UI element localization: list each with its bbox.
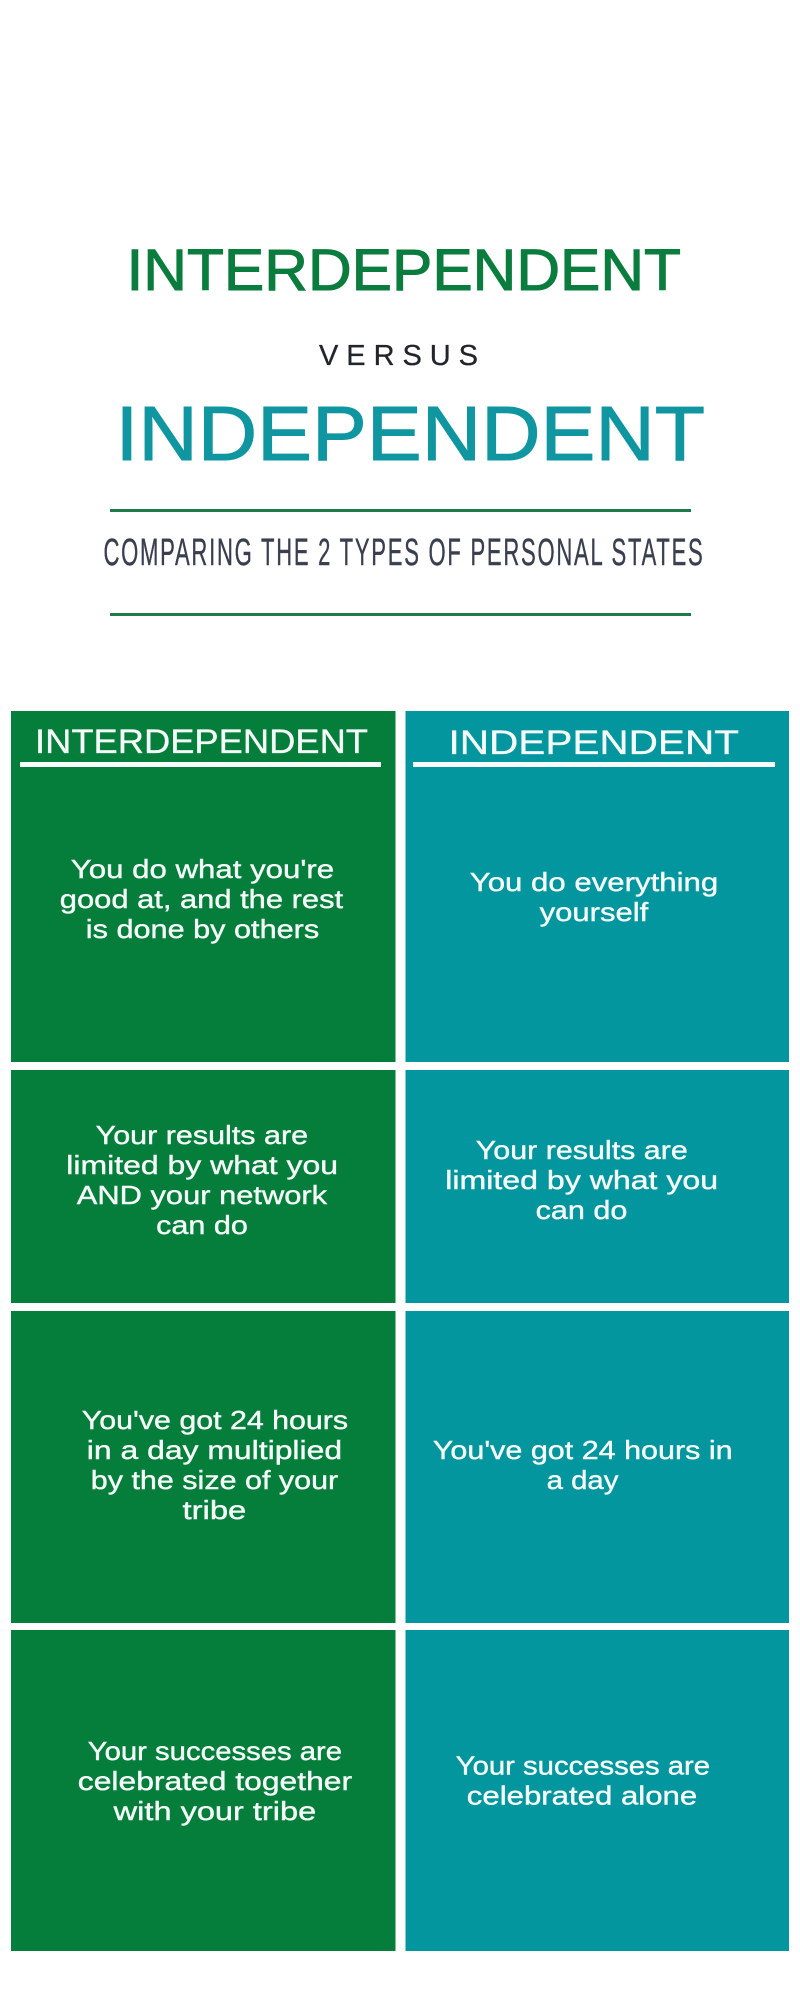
panel: independent row 2: limited by what you bbox=[445, 1165, 718, 1195]
title block bbox=[104, 238, 705, 616]
text: successes celebrated together: Your successes are bbox=[88, 1736, 342, 1766]
column header: independent: INDEPENDENT bbox=[448, 724, 739, 762]
text: results limited by you and network: Your results are bbox=[96, 1120, 308, 1150]
column header: interdependent: INTERDEPENDENT bbox=[35, 723, 368, 761]
panel: independent row 3: a day bbox=[547, 1465, 618, 1495]
panel: independent row 1 bbox=[406, 711, 789, 1062]
panel: interdependent row 4: with your tribe bbox=[112, 1796, 316, 1826]
panel: interdependent row 2: can do bbox=[156, 1210, 248, 1240]
panel: independent row 4 bbox=[406, 1630, 789, 1951]
heading: interdependent: INTERDEPENDENT bbox=[126, 238, 681, 303]
text: you do what you're good at: You do what you're bbox=[71, 854, 334, 884]
panel: interdependent row 2 bbox=[11, 1070, 396, 1303]
panel: interdependent row 3: by the size of your bbox=[91, 1465, 339, 1495]
panel: interdependent row 1: good at, and the rest bbox=[60, 884, 344, 914]
panel: interdependent row 3: in a day multiplied bbox=[87, 1435, 342, 1465]
panel: interdependent row 2: limited by what you bbox=[66, 1150, 338, 1180]
header underline bbox=[413, 762, 775, 767]
heading: independent: INDEPENDENT bbox=[116, 391, 705, 477]
panel: independent row 2 bbox=[406, 1070, 789, 1303]
divider line bottom bbox=[110, 613, 691, 616]
text: 24 hours in a day: You've got 24 hours in bbox=[433, 1435, 733, 1465]
panel: interdependent row 2: AND your network bbox=[77, 1180, 328, 1210]
panel: interdependent row 4: celebrated together bbox=[78, 1766, 353, 1796]
text: successes celebrated alone: Your successes are bbox=[456, 1750, 710, 1780]
panel: interdependent row 3 bbox=[11, 1311, 396, 1623]
panel: independent row 4: celebrated alone bbox=[467, 1780, 697, 1810]
panel: independent row 1: yourself bbox=[540, 897, 649, 927]
text: you do everything yourself: You do everything bbox=[470, 867, 718, 897]
divider line top bbox=[110, 509, 691, 512]
text: results limited by you: Your results are bbox=[476, 1135, 688, 1165]
panel: independent row 2: can do bbox=[536, 1195, 627, 1225]
panel: interdependent row 1: is done by others bbox=[86, 914, 319, 944]
panel: interdependent row 3: tribe bbox=[182, 1495, 246, 1525]
text: 24 hours multiplied by tribe: You've got 24 hours bbox=[82, 1405, 348, 1435]
panel: interdependent row 1 bbox=[11, 711, 396, 1062]
heading: versus: VERSUS bbox=[319, 340, 478, 372]
panel: interdependent row 4 bbox=[11, 1630, 396, 1951]
header underline bbox=[20, 762, 381, 767]
panel: independent row 3 bbox=[406, 1311, 789, 1623]
